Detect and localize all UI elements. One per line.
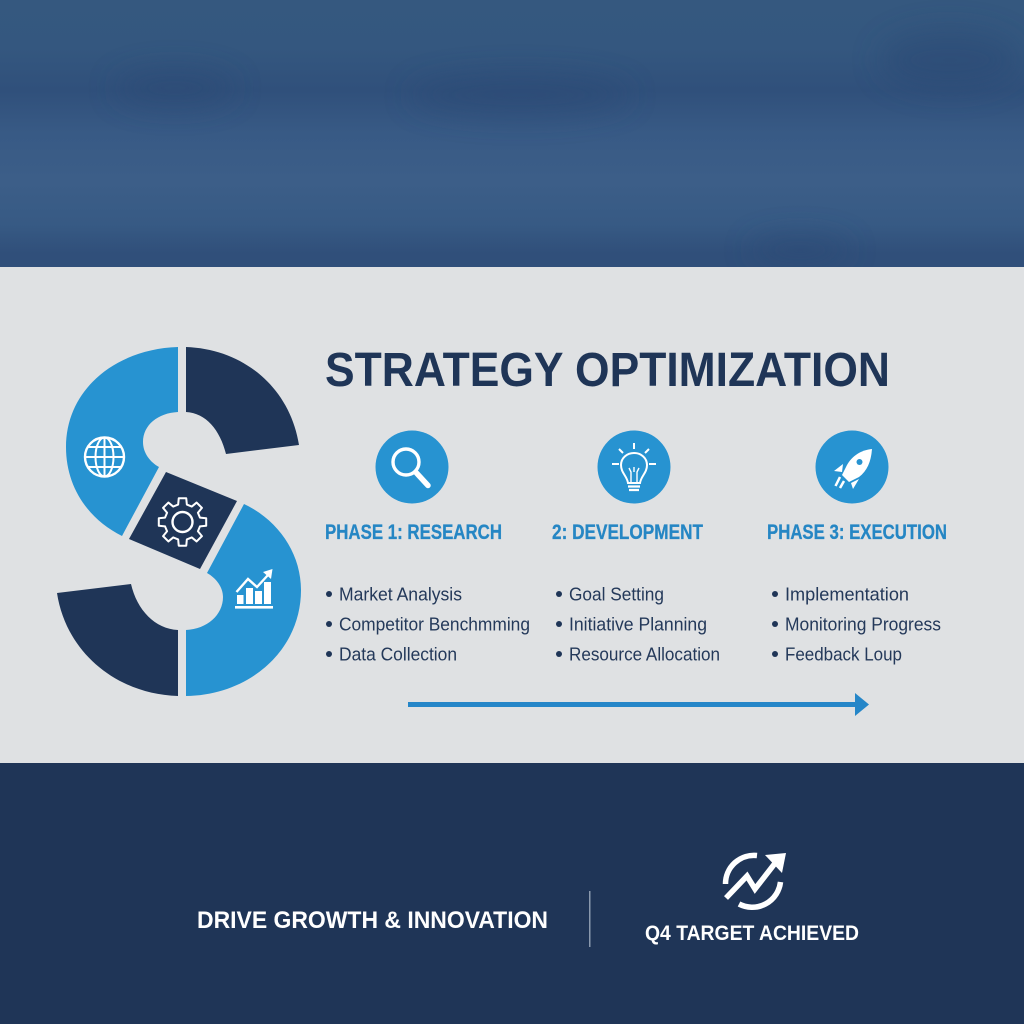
icon: rocket — [816, 430, 888, 504]
phase 3 column — [767, 430, 947, 664]
heading: phase 2: 2: DEVELOPMENT — [552, 521, 703, 544]
S diagram — [57, 347, 301, 696]
tagline: DRIVE GROWTH & INNOVATION — [197, 907, 548, 934]
arrow — [408, 693, 869, 716]
bullet list: phase 3: Monitoring Progress — [785, 614, 941, 634]
bullet list: phase 1: Data Collection — [339, 644, 457, 664]
icon: globe — [85, 438, 124, 476]
icon: target growth arrow — [725, 853, 786, 907]
S segment: top left blue — [66, 347, 178, 536]
S segment: lower left navy — [57, 584, 178, 696]
bullet list: phase 3 — [772, 584, 941, 664]
bullet list: phase 1: Market Analysis — [339, 584, 462, 604]
icon: lightbulb — [598, 430, 670, 504]
divider — [589, 891, 590, 947]
bullet list: phase 2: Resource Allocation — [569, 644, 720, 664]
bottom band — [0, 763, 1024, 1024]
icon: magnifier — [376, 430, 448, 504]
title: STRATEGY OPTIMIZATION — [325, 344, 890, 397]
heading: phase 3: PHASE 3: EXECUTION — [767, 521, 947, 544]
S segment: centre navy — [129, 472, 237, 569]
phase 1 column — [325, 430, 530, 664]
bullet list: phase 3: Implementation — [785, 584, 909, 604]
icon: gear — [159, 498, 206, 546]
achievement label: Q4 TARGET ACHIEVED — [645, 922, 859, 945]
S segment: lower right blue — [186, 504, 301, 696]
bullet list: phase 3: Feedback Loup — [785, 644, 902, 664]
phase 2 column — [552, 430, 720, 664]
bullet list: phase 2 — [556, 584, 720, 664]
icon: growth chart — [235, 569, 273, 609]
heading: phase 1: PHASE 1: RESEARCH — [325, 521, 502, 544]
S segment: top right navy — [186, 347, 299, 454]
bullet list: phase 2: Initiative Planning — [569, 614, 707, 634]
bullet list: phase 1: Competitor Benchmming — [339, 614, 530, 634]
bullet list: phase 2: Goal Setting — [569, 584, 664, 604]
bullet list: phase 1 — [326, 584, 530, 664]
middle panel background — [0, 267, 1024, 763]
top band — [0, 0, 1024, 267]
